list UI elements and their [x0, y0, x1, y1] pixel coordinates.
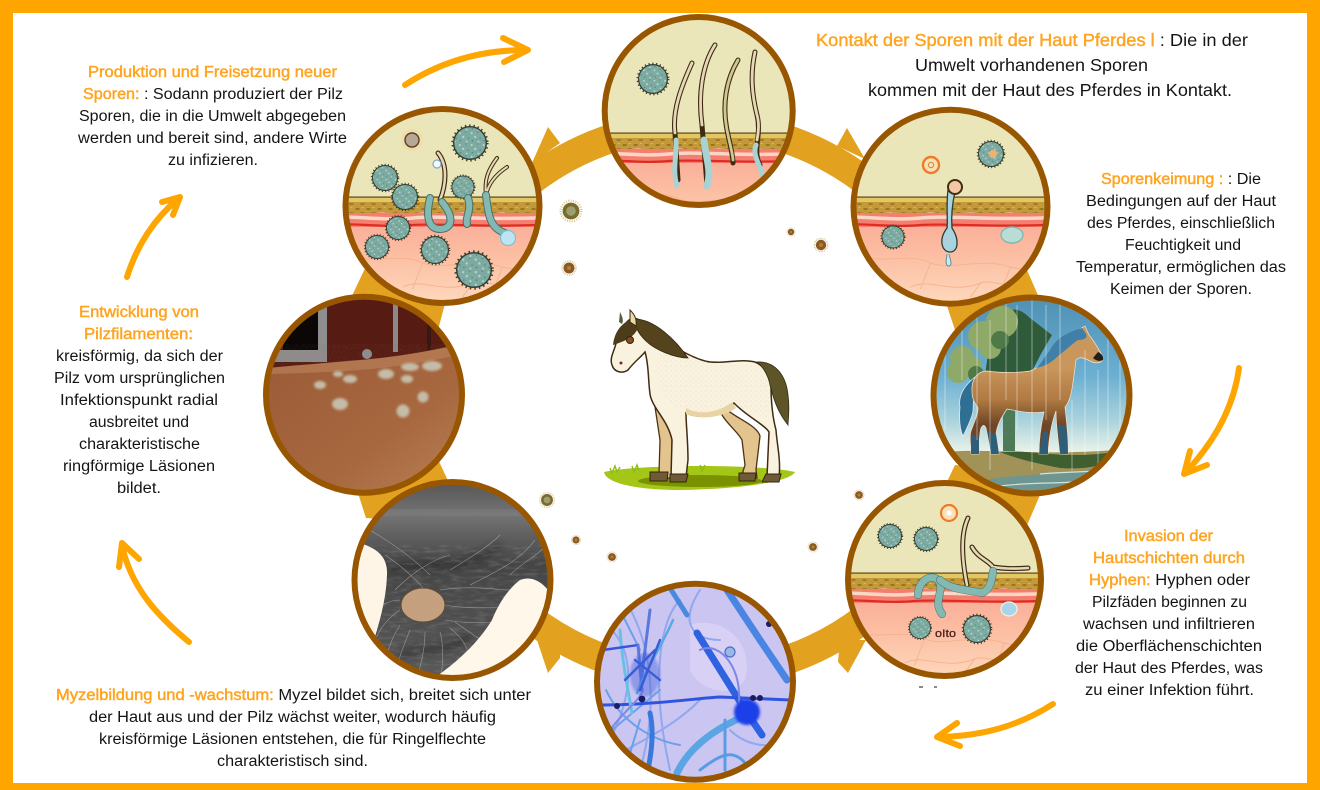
circle: spore germination (top right) — [850, 106, 1050, 307]
text: spore germination — [1076, 171, 1286, 298]
text: invasion of skin layers: Invasion der — [1124, 528, 1213, 545]
text: invasion of skin layers: Hautschichten durch — [1093, 550, 1245, 567]
text: mycelium formation and growth: charakteristisch sind. — [217, 753, 368, 770]
text: production and release of spores: Produktion und Freisetzung neuer — [88, 64, 337, 81]
text: production and release of spores: zu infizieren. — [168, 152, 258, 169]
text: development of fungal filaments: bildet. — [117, 480, 161, 497]
cycle ring with arrowheads — [350, 124, 1040, 675]
mane — [636, 319, 688, 358]
text: mycelium formation and growth: der Haut aus und der Pilz wächst weiter, wodurch häufig — [89, 709, 496, 726]
text: development of fungal filaments — [54, 304, 225, 497]
arrow: left column upward — [127, 197, 180, 277]
stray lettering: oIto — [935, 628, 956, 640]
circle: horse hide with ring lesions — [260, 292, 470, 500]
text: development of fungal filaments: Pilzfilamenten: — [84, 326, 193, 343]
text: contact of spores with skin: kommen mit der Haut des Pferdes in Kontakt. — [868, 80, 1232, 100]
circle: spores on skin and hairs (top) — [602, 14, 796, 208]
text: contact of spores with skin: Umwelt vorhandenen Sporen — [915, 55, 1148, 75]
forelock — [613, 320, 638, 345]
ground and water — [954, 450, 1109, 490]
text: mycelium formation and growth: Myzelbildung und -wachstum: Myzel bildet sich, breitet sich unter — [56, 687, 531, 704]
text: production and release of spores — [77, 64, 347, 169]
arrow: right side downward — [1184, 368, 1239, 474]
text: spore germination: des Pferdes, einschließlich — [1087, 215, 1275, 232]
text: invasion of skin layers: Hyphen: Hyphen oder — [1089, 572, 1250, 589]
text: spore germination: Temperatur, ermöglichen das — [1076, 259, 1286, 276]
text: contact of spores with skin — [816, 30, 1248, 100]
arrow: top left to top circle — [405, 38, 528, 85]
text: invasion of skin layers — [1075, 528, 1263, 699]
tail — [757, 362, 789, 425]
text: development of fungal filaments: Pilz vom ursprünglichen — [54, 370, 225, 387]
circle: horse standing in rain — [930, 294, 1133, 500]
circle: hyphae invading skin layers (lower right) — [845, 480, 1044, 688]
text: development of fungal filaments: kreisförmig, da sich der — [56, 348, 223, 365]
arrow: bottom left upward — [119, 543, 189, 642]
text: spore germination: Keimen der Sporen. — [1110, 281, 1252, 298]
grass — [604, 465, 795, 490]
far legs — [654, 400, 760, 478]
text: spore germination: Sporenkeimung : : Die — [1101, 171, 1261, 188]
circle: spore production and release (top left) — [342, 106, 542, 306]
text: spore germination: Feuchtigkeit und — [1125, 237, 1241, 254]
left finger — [358, 544, 388, 636]
rain — [945, 300, 1120, 470]
horse — [960, 326, 1103, 454]
text: development of fungal filaments: Infektionspunkt radial — [60, 392, 218, 409]
ears, eye and nostril — [619, 310, 636, 364]
text: production and release of spores: Sporen, die in die Umwelt abgegeben — [79, 108, 346, 125]
text: development of fungal filaments: charakteristische — [79, 436, 200, 453]
lesion — [401, 588, 445, 622]
text: production and release of spores: Sporen: : Sodann produziert der Pilz — [83, 86, 343, 103]
arrow: bottom right leftward — [937, 704, 1053, 746]
floating spores — [540, 201, 864, 562]
text: production and release of spores: werden und bereit sind, andere Wirte — [77, 130, 347, 147]
body — [611, 318, 780, 477]
text: development of fungal filaments: ringförmige Läsionen — [63, 458, 215, 475]
text: development of fungal filaments: ausbreitet und — [89, 414, 189, 431]
text: development of fungal filaments: Entwicklung von — [79, 304, 199, 321]
text: mycelium formation and growth — [56, 687, 531, 770]
text: invasion of skin layers: Pilzfäden beginnen zu — [1092, 594, 1247, 611]
circle: grey fur with lesion between fingers — [352, 479, 554, 681]
text: invasion of skin layers: der Haut des Pferdes, was — [1075, 660, 1263, 677]
tree — [947, 306, 1052, 451]
central horse illustration — [604, 310, 795, 490]
text: invasion of skin layers: wachsen und infiltrieren — [1082, 616, 1255, 633]
text: mycelium formation and growth: kreisförmige Läsionen entstehen, die für Ringelflechte — [99, 731, 486, 748]
text: contact of spores with skin: Kontakt der Sporen mit der Haut Pferdes l : Die in der — [816, 30, 1248, 50]
text: invasion of skin layers: die Oberflächenschichten — [1076, 638, 1262, 655]
right finger — [440, 578, 548, 675]
hooves — [650, 472, 781, 482]
text: invasion of skin layers: zu einer Infektion führt. — [1085, 682, 1254, 699]
text: spore germination: Bedingungen auf der Haut — [1086, 193, 1277, 210]
circle: blue stained mycelium under microscope (bottom) — [594, 581, 796, 783]
